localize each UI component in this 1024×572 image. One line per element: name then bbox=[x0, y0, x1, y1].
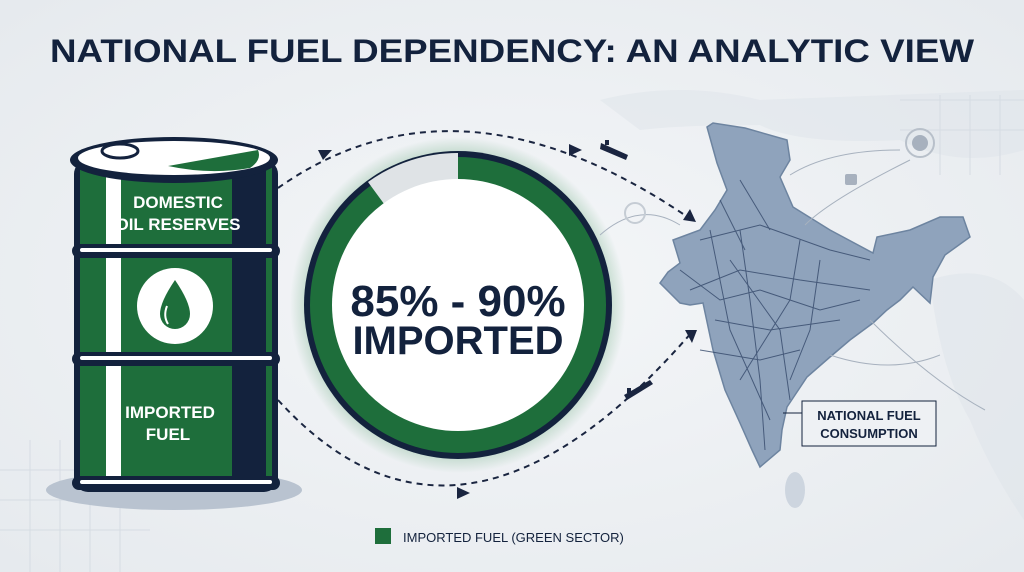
barrel label: domestic: DOMESTIC bbox=[133, 193, 223, 212]
donut label: 85% - 90% bbox=[350, 277, 566, 326]
callout: national fuel consumption bbox=[783, 401, 936, 446]
barrel label: imported: IMPORTED bbox=[125, 403, 215, 422]
barrel label: domestic: OIL RESERVES bbox=[115, 215, 241, 234]
barrel bbox=[46, 137, 302, 510]
icon: oil drop bbox=[137, 268, 213, 344]
arrows: dashed flow paths bbox=[278, 131, 692, 485]
barrel label: domestic bbox=[115, 193, 241, 234]
donut label bbox=[350, 277, 566, 363]
icon: tanker ships bbox=[600, 140, 653, 400]
barrel label: imported: FUEL bbox=[146, 425, 190, 444]
title: NATIONAL FUEL DEPENDENCY: AN ANALYTIC VIEW bbox=[50, 33, 975, 69]
callout: national fuel consumption: NATIONAL FUEL bbox=[817, 408, 921, 423]
callout: national fuel consumption: CONSUMPTION bbox=[820, 426, 918, 441]
barrel label: imported bbox=[125, 403, 215, 444]
map: India bbox=[660, 123, 970, 508]
donut label: IMPORTED bbox=[352, 319, 564, 363]
background map shapes bbox=[600, 90, 1024, 520]
callout lines & icons bbox=[600, 150, 985, 410]
legend: IMPORTED FUEL (GREEN SECTOR) bbox=[403, 530, 624, 545]
donut chart bbox=[290, 137, 626, 473]
